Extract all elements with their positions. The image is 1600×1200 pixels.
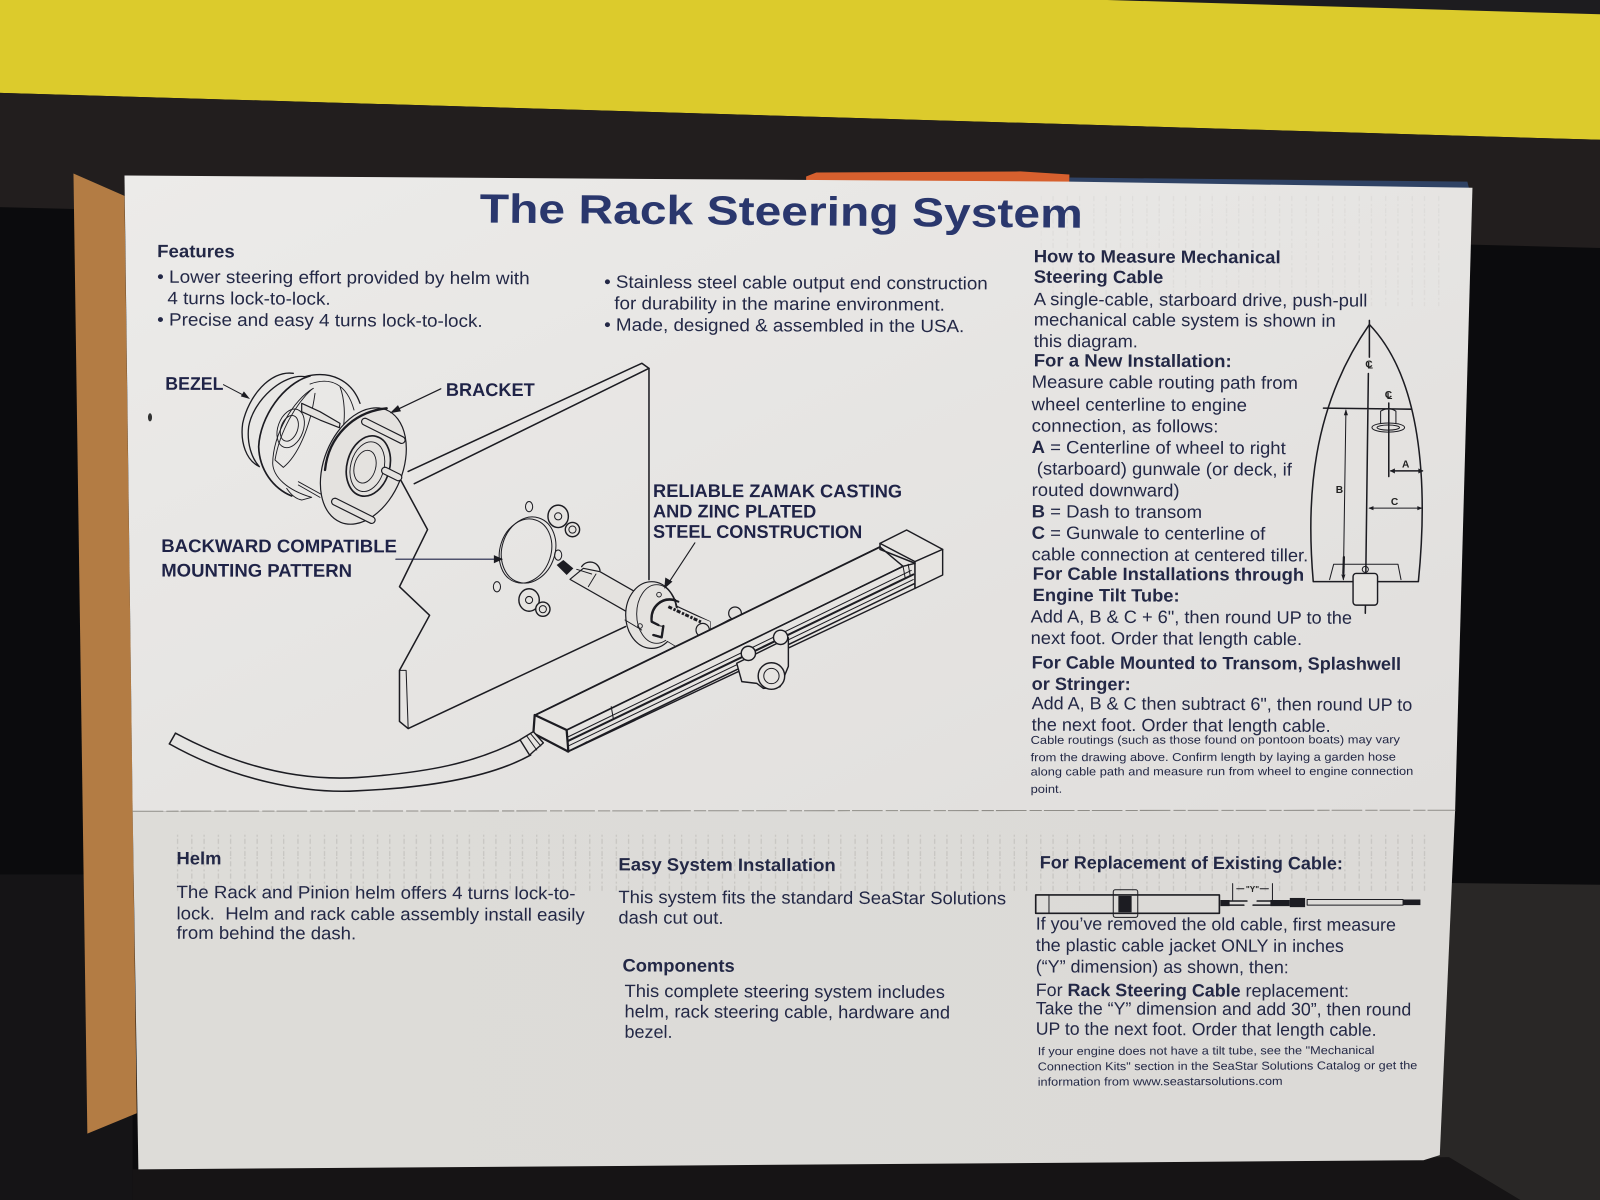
text block: replacement of existing cable: If you’ve removed the old cable, first measure [1036,914,1396,935]
text block: features: Features [157,241,235,261]
diagram: boat hull measurements [1311,320,1423,613]
Y dimension mark: "Y" [1246,885,1259,894]
text block: how to measure: Add A, B & C + 6", then round UP to the [1031,606,1352,628]
text block: how to measure: wheel centerline to engine [1031,394,1247,415]
text block: features: • Stainless steel cable output end construction [604,272,988,293]
dimension B [1336,409,1348,581]
ribbed fitting, tube and end [1270,898,1420,907]
text block: replacement of existing cable: If your engine does not have a tilt tube, see the "Mechanical [1038,1045,1374,1058]
arrow: backward compatible pattern [396,555,503,563]
text block: how to measure: Cable routings (such as those found on pontoon boats) may vary [1031,734,1400,747]
diagram labels: BEZEL [165,373,224,394]
text block: how to measure: B = Dash to transom [1032,501,1202,522]
text block: replacement of existing cable: Take the “Y” dimension and add 30”, then round [1036,998,1411,1020]
text block: how to measure: Add A, B & C then subtract 6", then round UP to [1032,693,1412,715]
text block: easy system installation: This system fits the standard SeaStar Solutions [618,887,1006,908]
text block: replacement of existing cable: UP to the next foot. Order that length cable. [1036,1019,1377,1040]
diagram labels: BACKWARD COMPATIBLE [161,535,397,556]
text block: how to measure: For Cable Installations through [1033,564,1304,585]
transom and outboard motor [1330,564,1401,605]
panel: lower box flap [133,810,1455,1169]
text block: helm: from behind the dash. [177,923,356,943]
text block: how to measure: C = Gunwale to centerline of [1032,523,1265,544]
text block: how to measure: connection, as follows: [1032,416,1218,436]
text block: easy system installation: dash cut out. [618,907,724,928]
text block: replacement of existing cable: (“Y” dimension) as shown, then: [1036,956,1289,977]
steering wheel [1372,409,1405,432]
text block: how to measure: A = Centerline of wheel to right [1032,437,1286,458]
shaft and casting flange [557,560,741,648]
text block: components: This complete steering system includes [624,981,945,1002]
text block: how to measure: (starboard) gunwale (or deck, if [1037,458,1292,480]
text block: how to measure: routed downward) [1032,480,1180,501]
text block: helm: Helm [177,848,221,868]
text block: components [622,955,950,1042]
lower flap text [177,848,1417,1089]
mounting holes and hardware [491,502,580,616]
dimension C: C [1391,497,1399,508]
arrow: bracket [390,389,441,413]
rack housing [533,530,943,752]
centerline marks: L [1367,360,1373,370]
rack body [1036,890,1230,917]
text block: components: helm, rack steering cable, hardware and [624,1001,950,1022]
text block: features: 4 turns lock-to-lock. [167,288,331,309]
text block: how to measure: cable connection at centered tiller. [1032,544,1308,565]
text block: replacement of existing cable: Connection Kits" section in the SeaStar Solutions Catalog or get the [1038,1060,1417,1073]
text block: replacement of existing cable: For Replacement of Existing Cable: [1040,852,1343,873]
dimension C [1368,497,1422,510]
bezel [242,373,360,500]
text block: how to measure: How to Measure Mechanical [1034,246,1281,267]
panel: upper box face [124,176,1472,811]
text block: how to measure: Engine Tilt Tube: [1033,585,1180,606]
text block: replacement of existing cable: information from www.seastarsolutions.com [1038,1076,1283,1089]
text block: how to measure: For a New Installation: [1034,350,1232,371]
text block: how to measure: this diagram. [1034,331,1138,351]
clamp and bolts [737,630,788,689]
text block: components: Components [622,955,735,976]
text block: how to measure: next foot. Order that length cable. [1031,628,1302,649]
fold line [133,810,1455,811]
text block: features: • Made, designed & assembled in the USA. [604,315,964,336]
text block: components: bezel. [624,1022,673,1042]
diagram labels [161,373,902,581]
dimension A: A [1402,459,1410,470]
text block: how to measure: For Cable Mounted to Transom, Splashwell [1032,652,1401,674]
text block: features: for durability in the marine environment. [614,293,945,315]
text block: helm: The Rack and Pinion helm offers 4 turns lock-to- [177,882,576,903]
mounting board [399,363,649,729]
text block: how to measure: Steering Cable [1034,267,1163,287]
dimension A [1390,459,1423,473]
text block: features: • Lower steering effort provided by helm with [157,267,530,288]
centerlines and dash [1323,320,1411,613]
text block: replacement of existing cable: the plastic cable jacket ONLY in inches [1036,935,1344,956]
text block: replacement of existing cable [1036,852,1417,1089]
centerline marks: C [1385,390,1393,401]
dimension B: B [1336,485,1343,496]
cable [169,732,543,791]
centerline marks: C [1365,359,1373,370]
text block: how to measure: A single-cable, starboard drive, push-pull [1034,289,1367,311]
text block: features [157,241,988,336]
diagram labels: MOUNTING PATTERN [161,560,352,581]
diagram labels: RELIABLE ZAMAK CASTING [653,480,902,501]
text block: easy system installation: Easy System Installation [618,854,836,875]
text block: how to measure: along cable path and measure run from wheel to engine connection [1031,766,1413,779]
text block: helm: lock. Helm and rack cable assembly install easily [177,903,585,925]
text block: how to measure: Measure cable routing path from [1032,372,1298,393]
centerline marks: L [1387,391,1393,401]
cardboard flap [73,173,137,1134]
diagram labels: AND ZINC PLATED [653,500,816,522]
text block: helm [177,848,585,943]
centerline marks [1365,359,1393,401]
text block: replacement of existing cable: For Rack Steering Cable replacement: [1036,980,1349,1001]
text block: features: • Precise and easy 4 turns lock-to-lock. [157,310,483,331]
bracket [304,395,423,537]
title: The Rack Steering System [480,185,1083,237]
diagram: cable "Y" dimension [1036,884,1420,917]
text block: how to measure: point. [1031,784,1062,796]
text block: how to measure: or Stringer: [1032,674,1131,694]
text block: how to measure: mechanical cable system is shown in [1034,310,1336,331]
box strip: orange and blue top edge [806,171,1469,190]
arrow: zamak casting [664,543,695,589]
diagram labels: BRACKET [446,379,535,400]
text block: easy system installation [618,854,1006,928]
hull outline [1311,324,1422,582]
text block: how to measure [1031,246,1413,796]
cut cable ends [1230,901,1270,905]
diagram: rack steering exploded view [169,363,943,791]
diagram labels: STEEL CONSTRUCTION [653,521,862,542]
arrow: bezel [223,385,250,399]
text block: how to measure: from the drawing above. Confirm length by laying a garden hose [1031,752,1396,764]
Y dimension mark [1233,884,1272,900]
text block: how to measure: the next foot. Order that length cable. [1032,715,1331,736]
